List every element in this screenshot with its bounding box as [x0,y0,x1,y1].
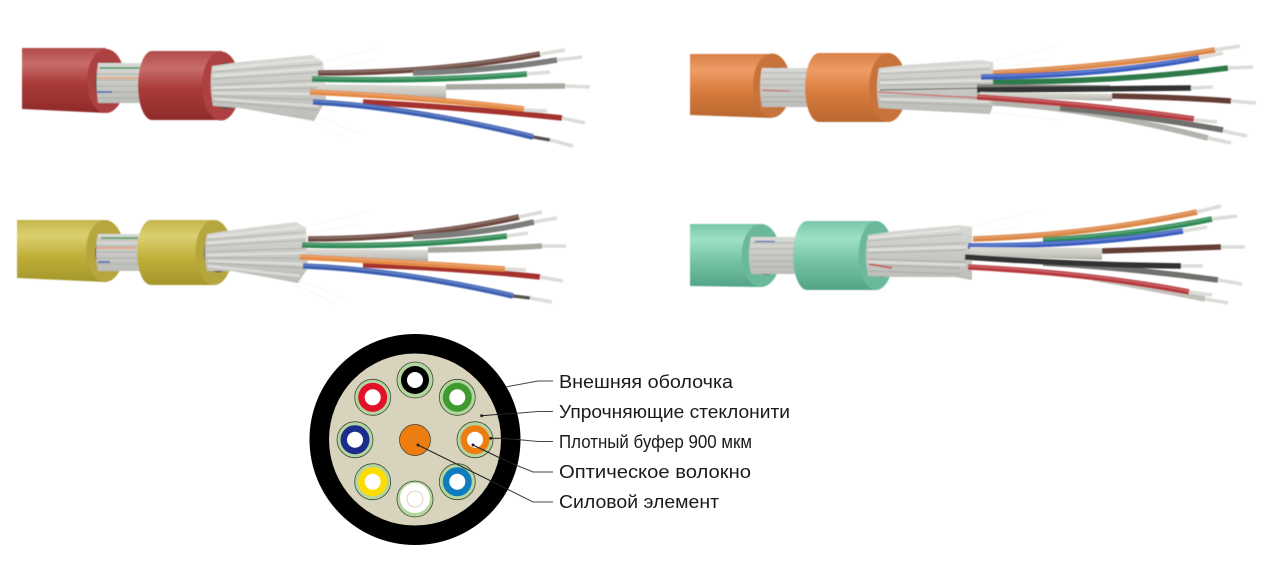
tube: black [397,362,433,398]
aqua fibre fan [866,210,1040,280]
exposed aramid fibres, aqua [749,237,796,274]
yellow wires [300,212,566,302]
yellow fibre fan [205,212,368,304]
label: outer sheath: Внешняя оболочка [559,372,734,392]
leader lines [416,381,553,502]
label: aramid yarns: Упрочняющие стеклонити [559,402,790,422]
aramid filler [329,354,501,526]
aqua jacket left section [690,224,781,287]
aqua jacket middle section [793,221,895,290]
tube: green [439,379,475,415]
cross-section diagram [310,334,520,545]
outer sheath [310,334,520,545]
exposed aramid fibres, yellow [96,234,140,271]
tube: navy [337,422,373,458]
yellow jacket left section [17,220,125,282]
orange fibre fan [877,46,1060,120]
orange wires [977,46,1256,143]
label: strength member: Силовой элемент [559,492,719,512]
orange jacket middle section [805,53,908,122]
exposed aramid fibres, orange [760,68,808,107]
yellow jacket middle section [137,220,232,285]
tube: white [397,481,433,517]
tube: yellow [355,464,391,500]
label: optical fibre: Оптическое волокно [559,462,751,482]
tube: red [355,379,391,415]
tube: blue [439,464,475,500]
orange jacket left section [690,54,792,118]
tube: orange [457,422,493,458]
aqua wires [965,206,1245,303]
red jacket middle section [138,51,241,120]
red fibre fan [211,48,380,140]
cable: yellow jacket [17,212,566,304]
red jacket left section [22,48,125,113]
central strength member [400,424,430,456]
cable: aqua jacket [690,206,1245,303]
cable: red jacket [22,48,590,146]
red wires [310,50,590,146]
cable: orange jacket [690,46,1256,143]
label: tight buffer: Плотный буфер 900 мкм [559,432,752,452]
exposed aramid fibres, red [96,63,142,103]
